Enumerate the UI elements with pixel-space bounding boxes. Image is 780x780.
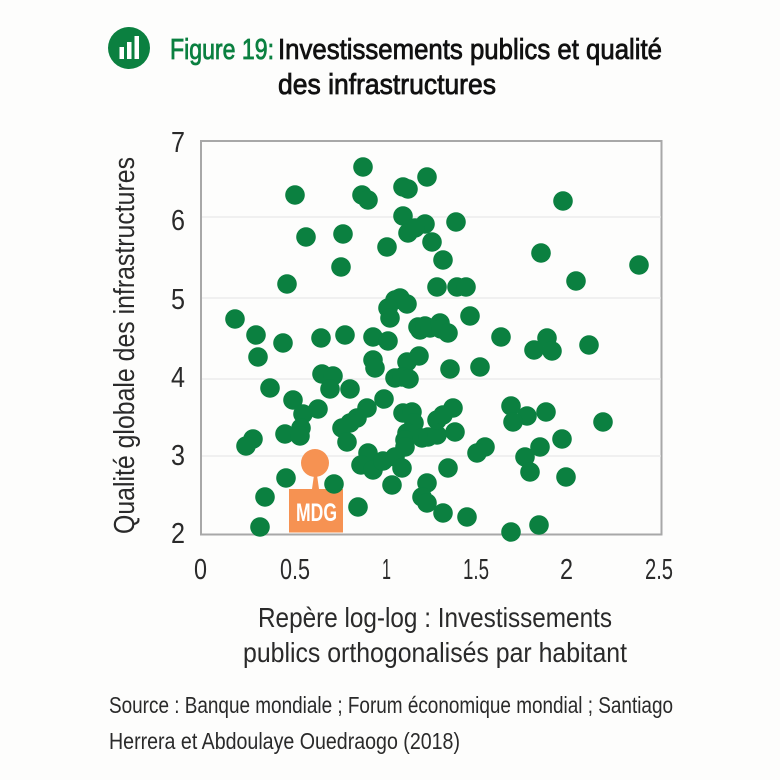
title: Figure 19: (170, 34, 274, 66)
x axis tick labels (194, 554, 673, 586)
x axis tick labels: 0 (194, 554, 207, 586)
title: Investissements publics et qualité (278, 34, 662, 66)
y axis tick labels: 4 (171, 362, 185, 394)
source note (109, 692, 673, 754)
y axis tick labels: 3 (171, 440, 185, 472)
plot frame and gridlines (201, 141, 662, 534)
y axis tick labels: 5 (171, 284, 185, 316)
x axis tick labels: 1 (382, 554, 391, 586)
title (170, 34, 662, 101)
y axis tick labels: 7 (171, 127, 185, 159)
y axis tick labels: 2 (171, 518, 185, 550)
MDG callout: MDG (296, 499, 337, 527)
icon: bar chart badge (108, 27, 150, 69)
y axis title: Qualité globale des infrastructures (109, 157, 141, 534)
y axis tick labels (171, 127, 185, 550)
MDG callout (289, 449, 343, 532)
x axis title: Repère log-log : Investissements (258, 602, 612, 633)
x axis tick labels: 2 (560, 554, 573, 586)
source note: Herrera et Abdoulaye Ouedraogo (2018) (109, 728, 460, 754)
x axis title: publics orthogonalisés par habitant (243, 637, 627, 668)
x axis tick labels: 2.5 (645, 554, 673, 586)
x axis tick labels: 1.5 (463, 554, 489, 586)
y axis tick labels: 6 (171, 205, 185, 237)
data points (225, 157, 649, 542)
x axis title (243, 602, 627, 668)
chart: scatter plot (109, 127, 673, 668)
source note: Source : Banque mondiale ; Forum économique mondial ; Santiago (109, 692, 673, 718)
title: des infrastructures (278, 69, 496, 101)
x axis tick labels: 0.5 (280, 554, 310, 586)
